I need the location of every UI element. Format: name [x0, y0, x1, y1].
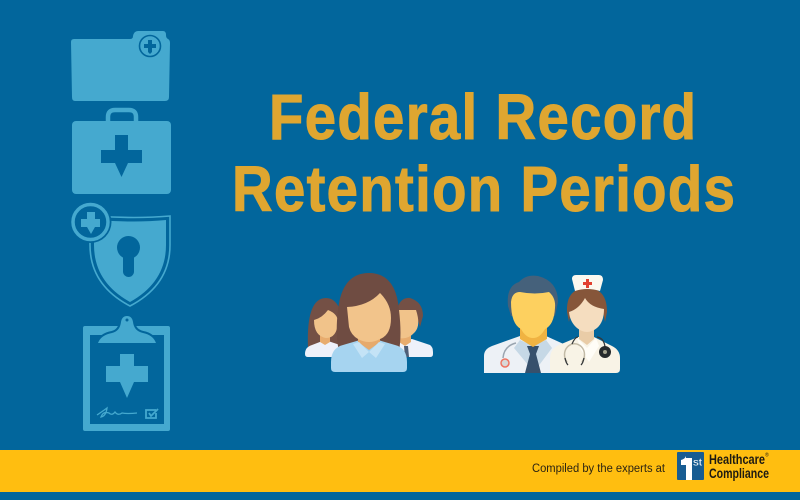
- logo: 1st Healthcare Compliance: Compliance: [709, 466, 769, 481]
- title: Federal Record: [269, 81, 697, 153]
- title: Retention Periods: [232, 153, 736, 225]
- icon: group of staff: [305, 273, 433, 372]
- center woman: [331, 273, 407, 372]
- icon: medical folder: [71, 31, 170, 101]
- icon: medical clipboard: [83, 316, 170, 431]
- icon: medical briefcase: [72, 110, 171, 194]
- footer credit text: Compiled by the experts at: [532, 463, 666, 475]
- icon: doctor and nurse: [484, 275, 620, 373]
- doctor: [484, 276, 568, 373]
- footer bar: [0, 450, 800, 492]
- logo: 1st Healthcare Compliance: ®: [765, 452, 769, 458]
- icon: security shield: [70, 201, 170, 306]
- left woman: [305, 298, 345, 357]
- logo wordmark: Healthcare: [709, 452, 765, 467]
- logo: 1st Healthcare Compliance: [677, 452, 769, 481]
- logo mark: st: [693, 458, 702, 468]
- right man: [397, 298, 433, 357]
- title: [232, 81, 736, 225]
- nurse: [550, 275, 620, 373]
